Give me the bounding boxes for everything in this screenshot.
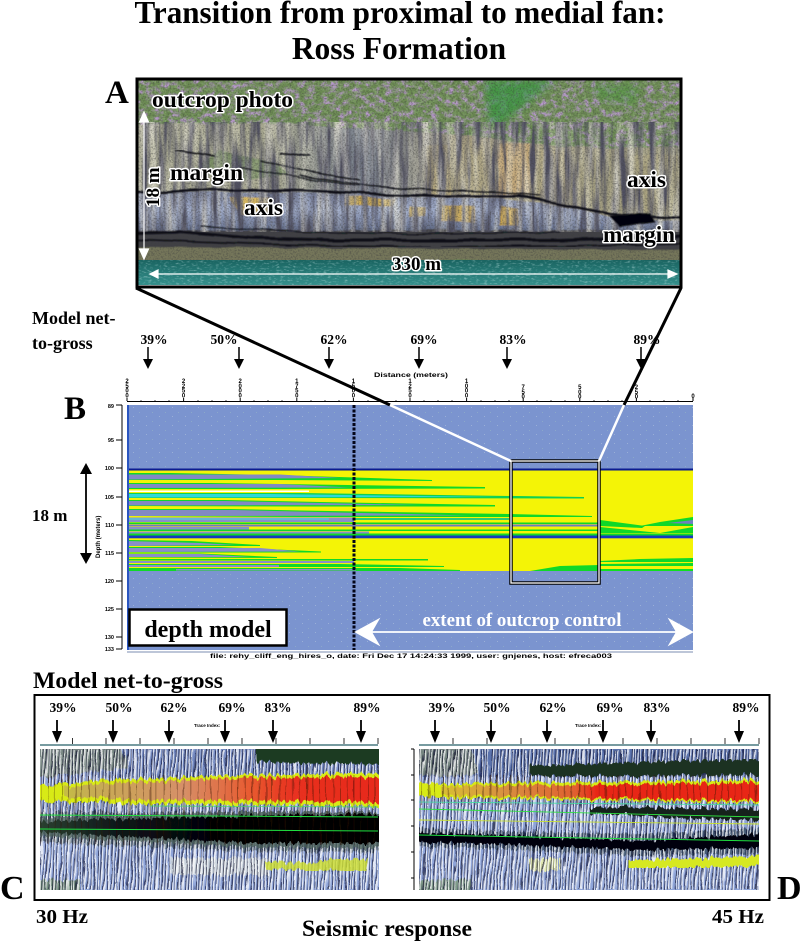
panel: depth model xyxy=(127,405,693,650)
depth axis: 100 xyxy=(105,466,114,472)
model net-to-gross heading, B: to-gross xyxy=(32,333,93,353)
distance axis: 1000 xyxy=(464,379,470,398)
depth axis: 105 xyxy=(105,495,114,501)
percentages and arrows: 39% xyxy=(50,700,76,715)
margin label, left: margin xyxy=(170,160,243,185)
file caption: file: rehy_cliff_eng_hires_o, date: Fri Dec 17 14:24:33 1999, user: gnjenes, host: efreca003 xyxy=(210,653,613,660)
model net-to-gross heading, C and D: Model net-to-gross xyxy=(33,668,223,693)
sand body: yellow xyxy=(129,470,693,571)
depth axis: 110 xyxy=(105,523,114,529)
model net-to-gross heading, B xyxy=(32,308,115,353)
depth axis xyxy=(96,404,122,653)
net-to-gross percentages and arrows, B: 69% xyxy=(410,332,438,347)
percentages and arrows: 83% xyxy=(644,700,670,715)
net-to-gross percentages and arrows, B: 50% xyxy=(210,332,238,347)
distance axis: 2000 xyxy=(237,379,243,398)
depth axis: 89 xyxy=(108,404,114,410)
330 m label: 330 m xyxy=(392,254,441,275)
scale arrow: 18 m xyxy=(140,112,148,259)
frame xyxy=(137,79,681,287)
distance axis: 750 xyxy=(520,385,526,399)
depth axis: 130 xyxy=(105,635,114,641)
depth axis: 133 xyxy=(105,647,114,653)
outcrop window box xyxy=(511,461,599,583)
percentages and arrows xyxy=(50,700,380,743)
trace axis xyxy=(411,723,759,890)
percentages and arrows: 50% xyxy=(484,700,510,715)
margin label, right: margin xyxy=(603,222,675,247)
distance axis: 1250 xyxy=(407,379,413,398)
photo image drawn xyxy=(130,78,690,288)
net-to-gross percentages and arrows, B: 62% xyxy=(320,332,348,347)
seismic response caption: Seismic response xyxy=(302,916,472,941)
depth axis: 125 xyxy=(105,607,114,613)
distance axis: 2500 xyxy=(124,379,130,398)
panel label: C: C xyxy=(0,870,25,907)
panel: outcrop photo xyxy=(130,78,690,288)
seismic image xyxy=(36,745,383,894)
45 Hz label: 45 Hz xyxy=(712,906,764,928)
scale arrow: 330 m xyxy=(150,270,677,278)
distance axis: 1750 xyxy=(294,379,300,398)
distance axis: 250 xyxy=(633,385,639,399)
distance axis: 1500 xyxy=(350,379,356,398)
18 m label: 18 m xyxy=(143,167,164,207)
shale wedges: lower unit xyxy=(129,540,693,571)
axis label, right: axis xyxy=(627,167,666,192)
panel label: A: A xyxy=(105,75,129,111)
panel label: B: B xyxy=(64,391,86,427)
percentages and arrows: 69% xyxy=(218,700,246,715)
model net-to-gross heading, B: Model net- xyxy=(32,308,115,328)
percentages and arrows: 62% xyxy=(540,700,566,715)
depth axis: Depth (meters) xyxy=(96,516,102,558)
distance axis xyxy=(124,372,696,402)
trace axis: Trace Index: xyxy=(194,723,221,728)
panel: 45 Hz seismic section xyxy=(411,700,763,894)
18 m arrow, B xyxy=(32,463,92,564)
depth model label: depth model xyxy=(144,617,272,643)
distance axis: Distance (meters) xyxy=(374,372,448,379)
seismic image xyxy=(415,745,763,894)
outcrop photo label: outcrop photo xyxy=(152,87,293,112)
shale wedges: upper unit xyxy=(129,468,693,538)
title xyxy=(134,0,666,66)
percentages and arrows: 62% xyxy=(160,700,188,715)
percentages and arrows: 69% xyxy=(596,700,624,715)
net-to-gross percentages and arrows, B: 83% xyxy=(500,332,526,347)
percentages and arrows xyxy=(428,700,760,743)
extent of outcrop control label: extent of outcrop control xyxy=(422,610,622,631)
axis label, left: axis xyxy=(244,195,283,220)
depth axis: 120 xyxy=(105,579,114,585)
dotted line: extent boundary xyxy=(352,405,356,650)
distance axis: 0 xyxy=(690,394,696,399)
percentages and arrows: 83% xyxy=(264,700,292,715)
net-to-gross percentages and arrows, B: 89% xyxy=(634,332,660,347)
distance axis: 2250 xyxy=(181,379,187,398)
distance axis: 500 xyxy=(577,385,583,399)
percentages and arrows: 50% xyxy=(106,700,132,715)
seismic frame xyxy=(34,695,770,900)
18 m arrow, B: 18 m xyxy=(32,506,67,525)
depth axis: 115 xyxy=(105,551,114,557)
net-to-gross percentages and arrows, B xyxy=(140,332,660,369)
percentages and arrows: 89% xyxy=(354,700,380,715)
title: Ross Formation xyxy=(292,31,507,66)
depth model label xyxy=(130,610,286,646)
net-to-gross percentages and arrows, B: 39% xyxy=(140,332,168,347)
panel: 30 Hz seismic section xyxy=(36,700,383,894)
connector lines from photo to model xyxy=(136,288,681,461)
percentages and arrows: 39% xyxy=(428,700,456,715)
trace axis: Trace Index: xyxy=(575,723,602,728)
percentages and arrows: 89% xyxy=(732,700,760,715)
30 Hz label: 30 Hz xyxy=(36,906,88,928)
depth axis: 95 xyxy=(108,438,114,444)
trace axis xyxy=(40,723,378,745)
extent arrow xyxy=(356,620,692,644)
